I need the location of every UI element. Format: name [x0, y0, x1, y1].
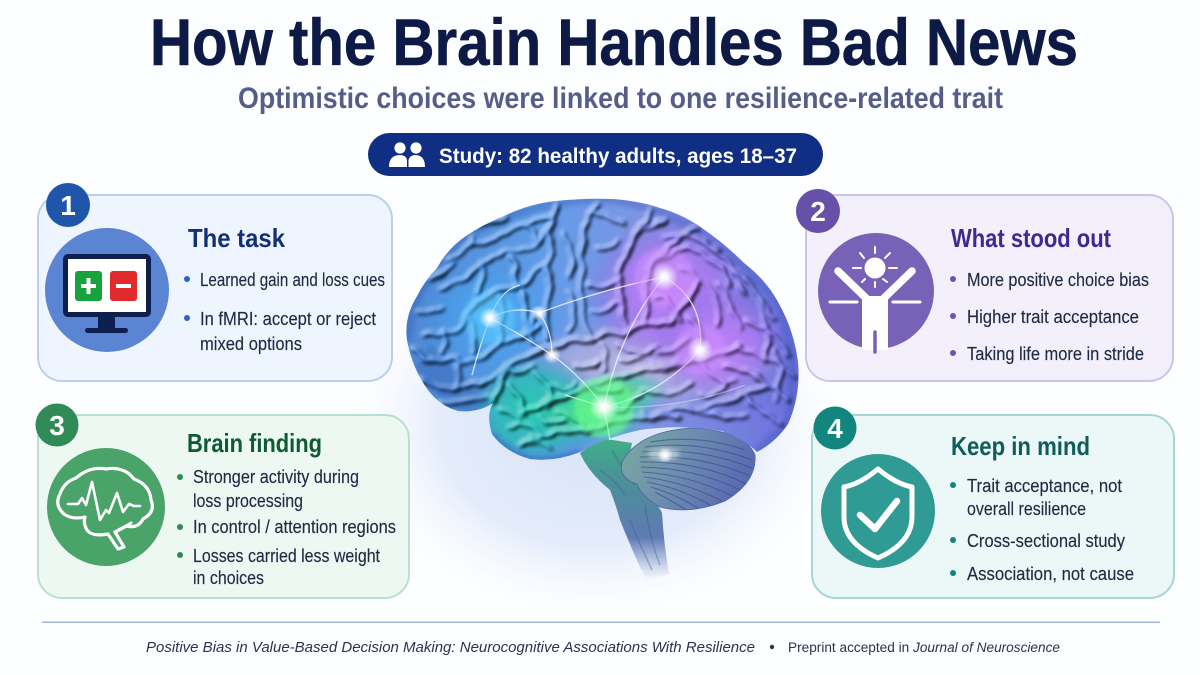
- footer rule: [42, 622, 1160, 623]
- cerebrum gyri folds: [410, 205, 795, 450]
- brainstem: [580, 438, 669, 580]
- bullet list: Stronger activity during: [193, 467, 359, 487]
- bullet list: [950, 270, 1149, 364]
- badge 2: 2: [810, 196, 826, 227]
- subtitle: Optimistic choices were linked to one resilience-related trait: [238, 82, 1003, 115]
- footer citation: Positive Bias in Value-Based Decision Making: Neurocognitive Associations With Resilience: [146, 639, 755, 656]
- central brain illustration: [400, 195, 805, 580]
- heading: brain finding: Brain finding: [187, 428, 322, 458]
- icon: brain with signal trace: [47, 448, 165, 566]
- neural connection lines: [472, 277, 745, 440]
- heading: the task: The task: [188, 223, 285, 253]
- bullet list: In fMRI: accept or reject: [200, 309, 376, 329]
- heading: what stood out: What stood out: [951, 223, 1111, 253]
- bullet list: Losses carried less weight: [193, 546, 380, 566]
- cerebellum: [621, 428, 755, 510]
- badge 3: 3: [49, 410, 65, 441]
- title: How the Brain Handles Bad News: [150, 5, 1078, 79]
- pill label: Study: 82 healthy adults, ages 18–37: [439, 145, 797, 168]
- panel 2: what stood out: [796, 189, 1173, 381]
- icon: people: [389, 142, 425, 167]
- glowing activity nodes: [464, 247, 726, 463]
- badge 4: 4: [827, 413, 843, 444]
- badge 3: [36, 404, 78, 446]
- badge 1: 1: [60, 190, 76, 221]
- footer citation: Preprint accepted in Journal of Neuroscience: [788, 640, 1060, 655]
- bullet list: In control / attention regions: [193, 517, 396, 537]
- bullet list: Higher trait acceptance: [967, 307, 1139, 327]
- badge 4: [814, 406, 856, 450]
- bullet list: Taking life more in stride: [967, 344, 1144, 364]
- bullet list: Cross-sectional study: [967, 531, 1125, 551]
- bullet list: [184, 270, 385, 354]
- bullet list: [177, 467, 396, 588]
- panel 1: the task: [38, 183, 392, 381]
- panel 4: keep in mind: [812, 406, 1174, 598]
- panel 3: brain finding: [36, 404, 409, 598]
- background glow behind brain: [335, 220, 855, 630]
- bullet list: Trait acceptance, not: [967, 476, 1122, 496]
- icon: shield with check: [821, 454, 935, 568]
- badge 1: [46, 183, 90, 227]
- cerebrum colour field: [400, 195, 805, 468]
- icon: person with raised arms and sun: [818, 233, 934, 352]
- bullet list: loss processing: [193, 491, 303, 511]
- bullet list: overall resilience: [967, 499, 1086, 519]
- footer citation: [146, 639, 1060, 656]
- bullet list: [950, 476, 1134, 584]
- heading: keep in mind: Keep in mind: [951, 431, 1090, 461]
- bullet list: in choices: [193, 568, 264, 588]
- badge 2: [796, 189, 840, 233]
- bullet list: Learned gain and loss cues: [200, 270, 385, 290]
- bullet list: mixed options: [200, 334, 302, 354]
- bullet list: More positive choice bias: [967, 270, 1149, 290]
- study pill: [368, 133, 823, 176]
- icon: monitor with gain and loss cues: [45, 228, 169, 352]
- bullet list: Association, not cause: [967, 564, 1134, 584]
